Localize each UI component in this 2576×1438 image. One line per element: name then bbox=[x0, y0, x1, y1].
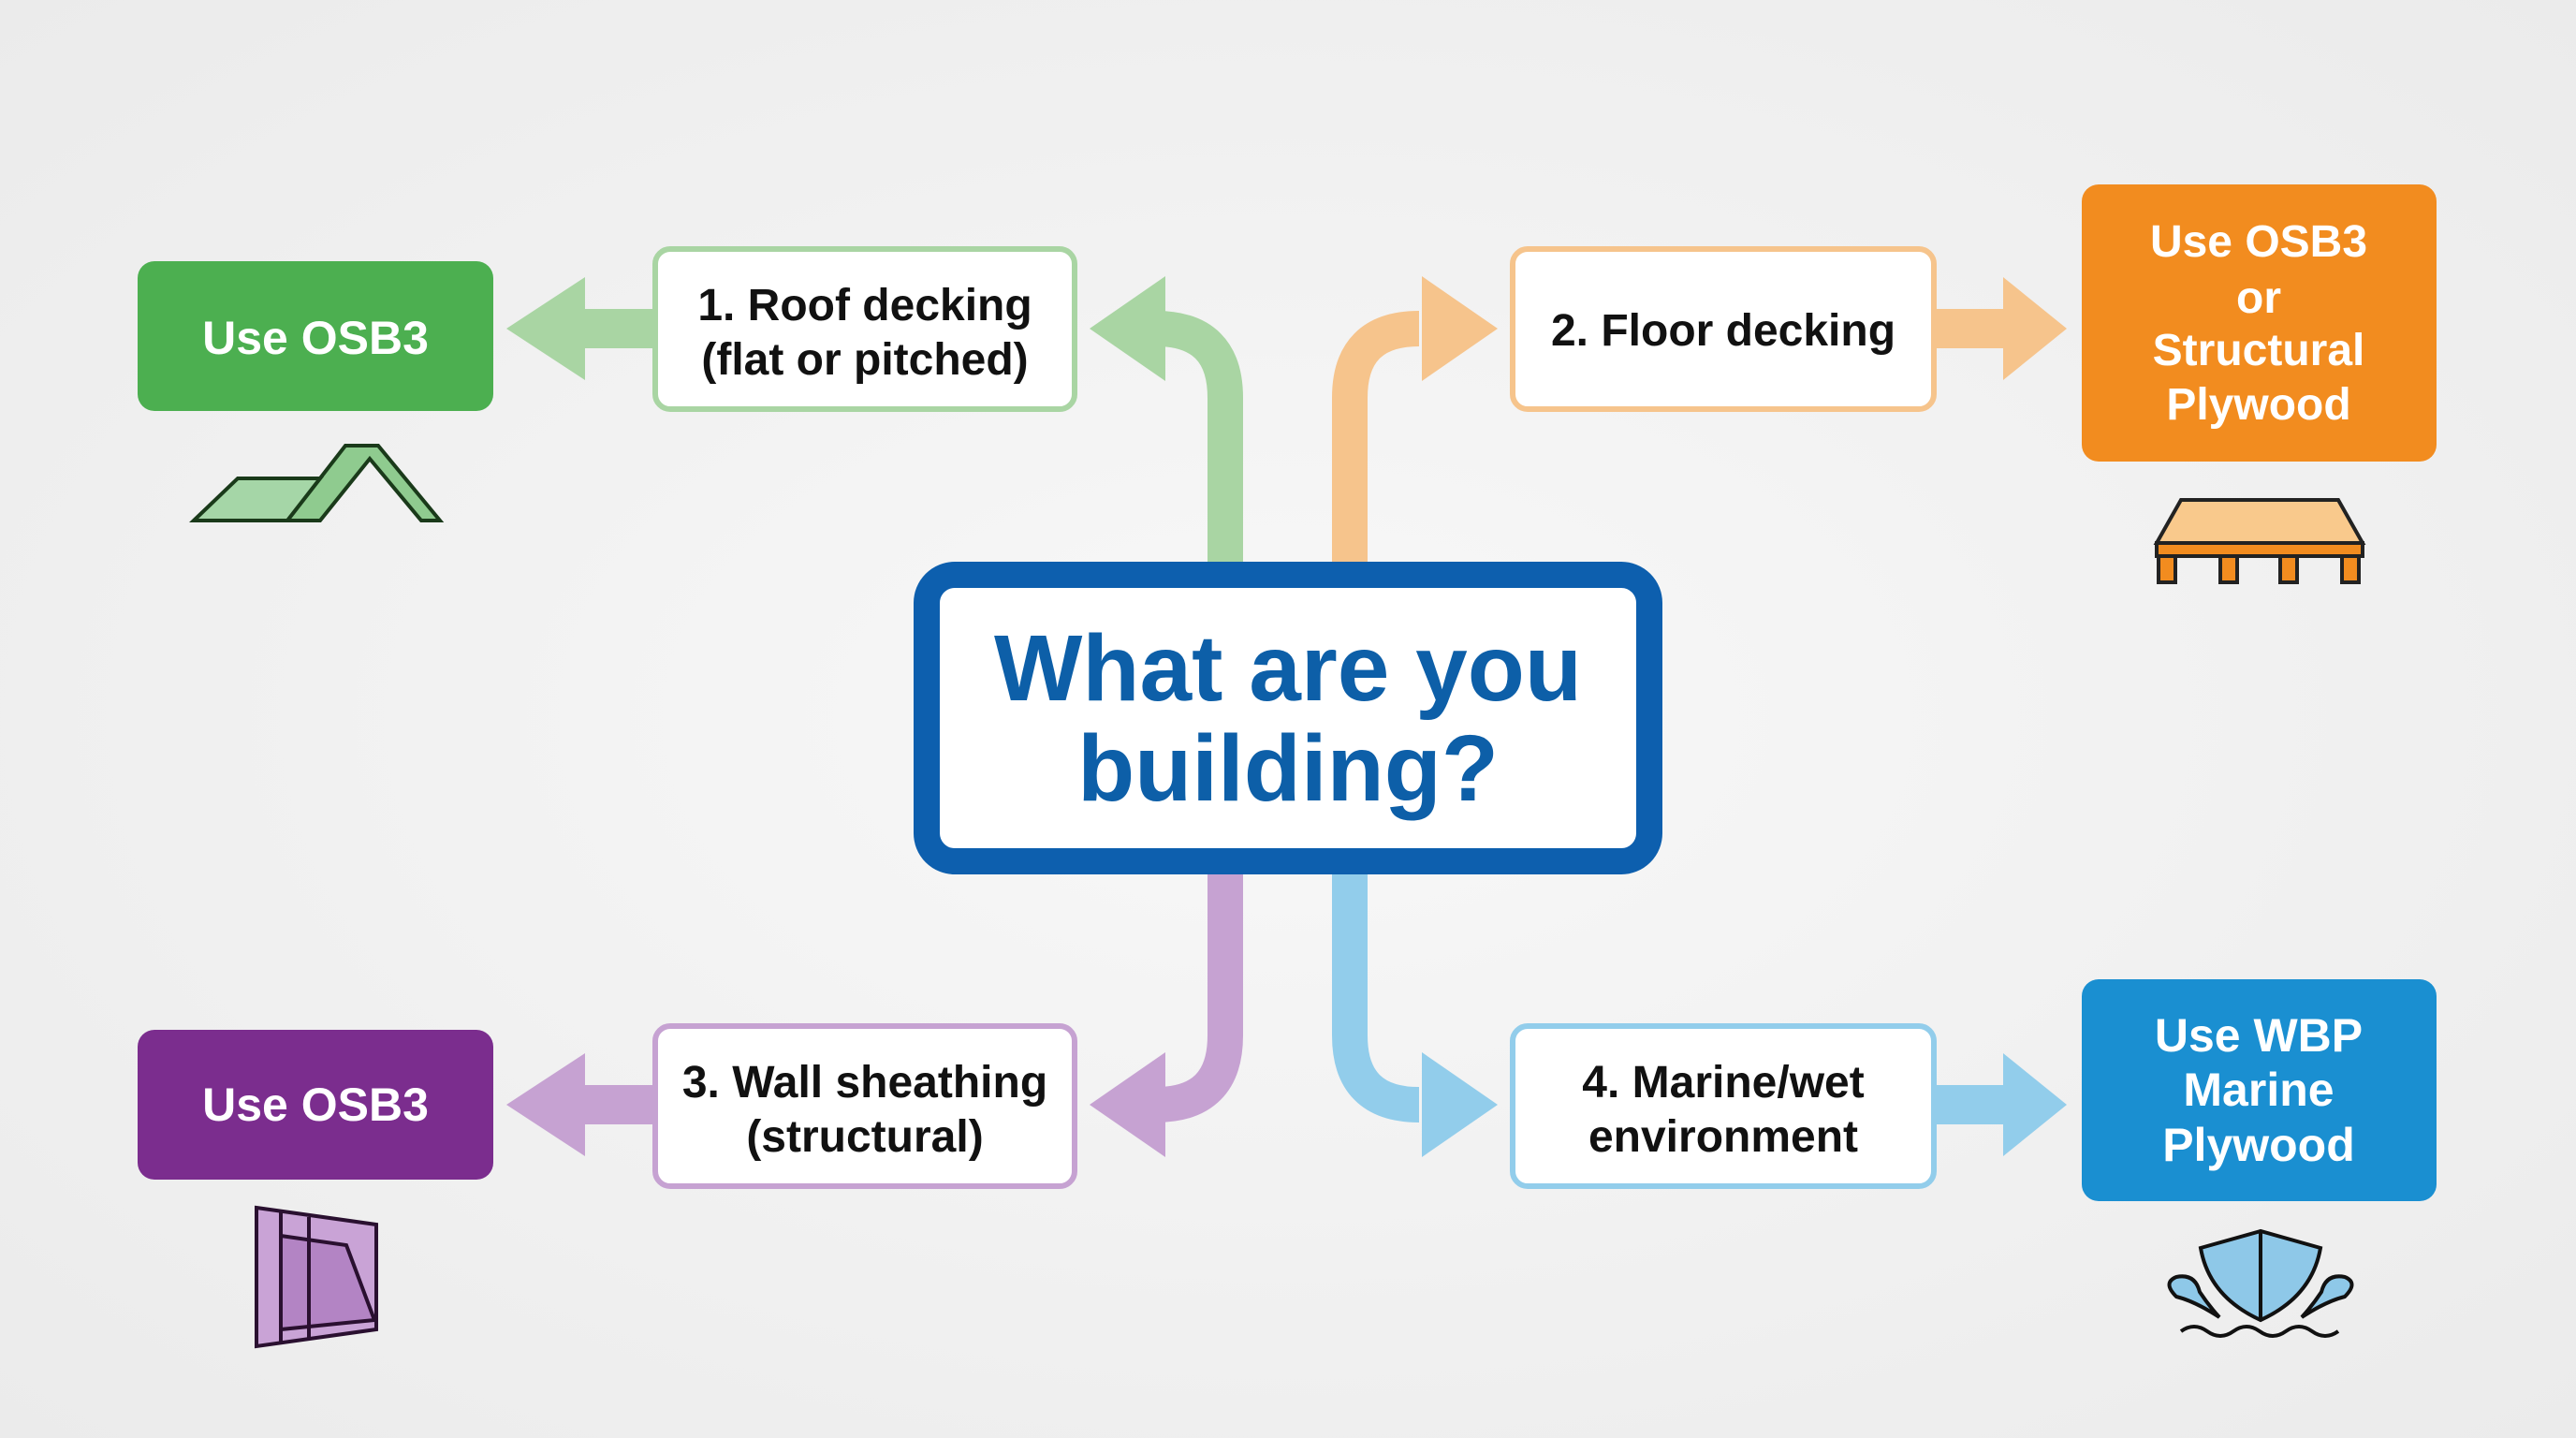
result: Use OSB3 purple: Use OSB3 bbox=[202, 1078, 429, 1131]
result: WBP Marine Plywood: Marine bbox=[2183, 1064, 2334, 1116]
result: WBP Marine Plywood: Plywood bbox=[2162, 1119, 2355, 1171]
icon: floor deck bbox=[2157, 500, 2363, 582]
result: OSB3 or Structural Plywood bbox=[2082, 184, 2437, 462]
box: wall sheathing: (structural) bbox=[746, 1112, 984, 1162]
box: roof decking bbox=[655, 249, 1075, 409]
box: marine: 4. Marine/wet bbox=[1582, 1058, 1865, 1108]
arrow: wall to OSB3 bbox=[506, 1053, 655, 1156]
arrow: center to marine bbox=[1350, 852, 1498, 1157]
center question box bbox=[927, 575, 1649, 861]
result: OSB3 or Structural Plywood: Structural bbox=[2153, 326, 2364, 375]
box: floor decking bbox=[1513, 249, 1934, 409]
box: roof decking: (flat or pitched) bbox=[701, 335, 1029, 385]
box: wall sheathing: 3. Wall sheathing bbox=[682, 1058, 1047, 1108]
box: floor decking: 2. Floor decking bbox=[1551, 306, 1895, 356]
arrow: center to roof decking bbox=[1090, 276, 1225, 580]
result: WBP Marine Plywood bbox=[2082, 979, 2437, 1201]
box: marine: environment bbox=[1588, 1112, 1858, 1162]
result: OSB3 or Structural Plywood: Plywood bbox=[2166, 380, 2351, 430]
result: Use OSB3 green bbox=[138, 261, 493, 411]
result: Use OSB3 green: Use OSB3 bbox=[202, 312, 429, 364]
result: WBP Marine Plywood: Use WBP bbox=[2155, 1009, 2363, 1062]
result: Use OSB3 purple bbox=[138, 1030, 493, 1180]
arrow: marine to result bbox=[1934, 1053, 2067, 1156]
box: roof decking: 1. Roof decking bbox=[697, 281, 1032, 330]
center question box: building? bbox=[1077, 716, 1499, 821]
arrow: center to floor decking bbox=[1350, 276, 1498, 580]
icon: roof bbox=[194, 446, 440, 521]
arrow: roof to OSB3 bbox=[506, 277, 655, 380]
box: wall sheathing bbox=[655, 1026, 1075, 1186]
result: OSB3 or Structural Plywood: or bbox=[2236, 273, 2281, 323]
icon: wall frame bbox=[256, 1208, 376, 1346]
arrow: center to wall sheathing bbox=[1090, 852, 1225, 1157]
icon: boat bbox=[2170, 1231, 2351, 1336]
center question box: What are you bbox=[994, 616, 1582, 721]
box: marine bbox=[1513, 1026, 1934, 1186]
result: OSB3 or Structural Plywood: Use OSB3 bbox=[2150, 217, 2367, 267]
arrow: floor to result bbox=[1934, 277, 2067, 380]
